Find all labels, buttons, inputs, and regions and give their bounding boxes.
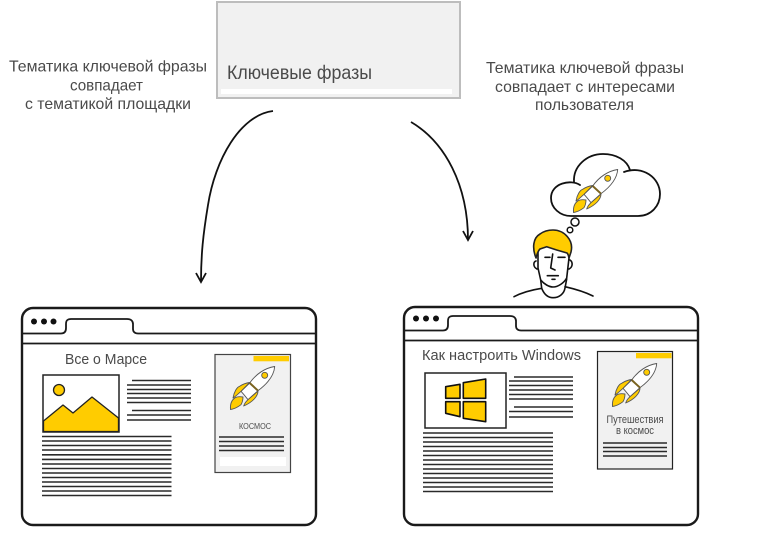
window dots — [31, 318, 56, 324]
browser frame — [22, 308, 316, 525]
arrow: to user — [411, 122, 473, 240]
ad text: Путешествия — [606, 414, 664, 426]
arrow: to site — [196, 111, 273, 282]
text block: site topic match: с тематикой площадки — [25, 96, 191, 113]
page title: Все о Марсе — [65, 352, 147, 368]
panel: left browser window — [22, 308, 316, 525]
side text lines — [509, 377, 573, 417]
side text lines — [127, 380, 191, 420]
body text lines — [42, 436, 172, 496]
page title: Как настроить Windows — [422, 348, 581, 364]
icon: rocket — [230, 366, 275, 410]
text block: site topic match: Тематика ключевой фразы — [9, 58, 207, 76]
icon: thought cloud with rocket — [551, 154, 660, 233]
text block: user interest match: пользователя — [535, 97, 634, 114]
panel: right browser window — [404, 307, 698, 525]
ad text: КОСМОС — [239, 421, 271, 431]
text block: site topic match: совпадает — [70, 78, 144, 94]
window dots — [413, 316, 439, 322]
icon: user head — [514, 230, 593, 298]
heading: key phrases: Ключевые фразы — [227, 62, 372, 84]
ad banner: space — [215, 354, 290, 472]
panel: key phrases box — [217, 2, 460, 98]
ad banner: space travel — [598, 352, 672, 469]
image placeholder with windows logo — [425, 373, 506, 428]
body text lines — [423, 433, 553, 492]
text block: user interest match: совпадает с интересами — [495, 79, 675, 96]
image placeholder with mountains — [43, 375, 119, 432]
ad text: в космос — [616, 425, 654, 437]
ad text — [606, 414, 664, 437]
text block: user interest match: Тематика ключевой фразы — [486, 60, 684, 77]
browser frame — [404, 307, 698, 525]
text block: site topic match — [9, 58, 207, 113]
text block: user interest match — [486, 60, 684, 114]
icon: rocket — [612, 364, 657, 406]
